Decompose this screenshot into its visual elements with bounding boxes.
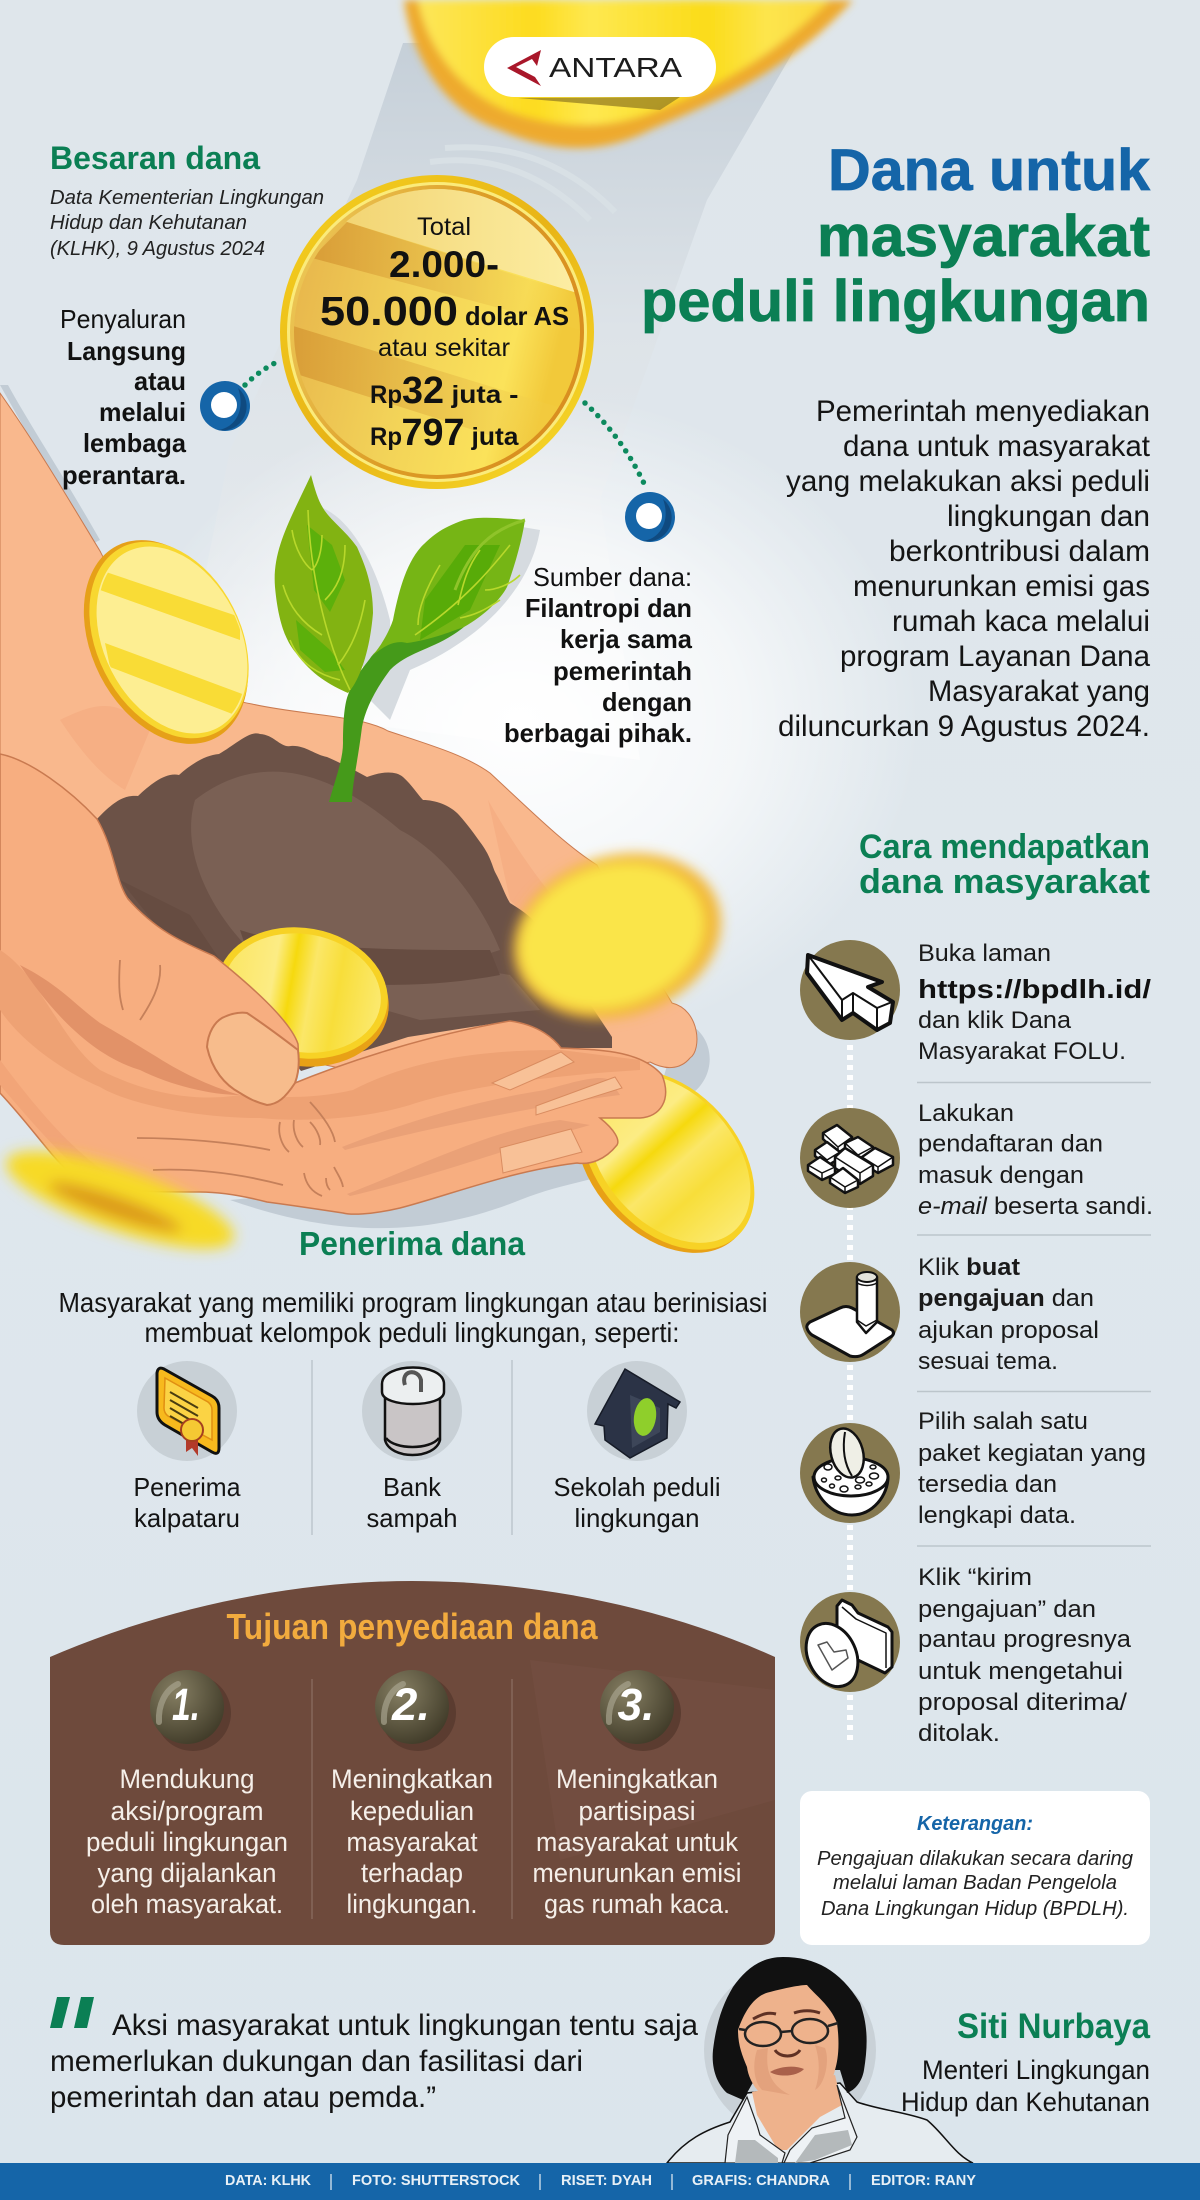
quote: memerlukan dukungan dan fasilitasi dari [50, 2045, 583, 2078]
recipients intro: Masyarakat yang memiliki program lingkungan atau berinisiasi [58, 1287, 768, 1318]
logo: ANTARA [484, 37, 716, 110]
coin text: 797 [402, 412, 464, 454]
goal 2: lingkungan. [346, 1889, 478, 1919]
step 4 text: tersedia dan [918, 1471, 1057, 1498]
speaker [901, 2007, 1150, 2117]
text: distribution: perantara. [62, 460, 186, 490]
heading: fund recipients: Penerima dana [299, 1225, 526, 1262]
step 1 text: https://bpdlh.id/ [918, 974, 1151, 1004]
intro text: dana untuk masyarakat [843, 430, 1151, 463]
text: distribution [60, 304, 187, 490]
note box: Pengajuan dilakukan secara daring [817, 1848, 1133, 1870]
coin text: 50.000 [320, 288, 458, 334]
stem [329, 627, 464, 802]
collar [725, 2085, 857, 2163]
recipient labels: kalpataru [134, 1503, 240, 1533]
source note: (KLHK), 9 Agustus 2024 [50, 238, 265, 260]
step 5 text: untuk mengetahui [918, 1658, 1123, 1685]
goal 1: aksi/program [110, 1796, 264, 1826]
glasses [739, 2019, 838, 2046]
heading: Besaran dana [50, 140, 324, 260]
logo: ANTARA: ANTARA [549, 52, 682, 83]
recipient labels: lingkungan [574, 1503, 700, 1533]
goal 3 [532, 1670, 742, 1919]
footer credits: RISET: DYAH [561, 2172, 652, 2189]
coin text [320, 213, 569, 454]
panel heading: Tujuan penyediaan dana [226, 1606, 598, 1647]
intro text: diluncurkan 9 Agustus 2024. [778, 710, 1150, 743]
goal 3: 3. [618, 1679, 654, 1730]
coin text: Rp [370, 381, 402, 409]
coin text: juta - [450, 381, 518, 409]
hand shadow [0, 385, 710, 1228]
text: fund source: Filantropi dan [525, 593, 692, 623]
shirt [667, 2083, 973, 2163]
text: fund source [504, 562, 693, 748]
step 5 text: ditolak. [918, 1720, 1000, 1747]
text: distribution: melalui [99, 397, 186, 427]
goal 3: masyarakat untuk [536, 1827, 738, 1857]
coin text: 2.000- [389, 244, 499, 285]
neck [752, 2075, 842, 2150]
step 2 text: masuk dengan [918, 1162, 1084, 1189]
step 2 text: e-mail beserta sandi. [918, 1193, 1153, 1220]
plant [275, 475, 540, 802]
step 3 text: ajukan proposal [918, 1317, 1099, 1344]
step 1 text [918, 940, 1151, 1065]
quote [50, 1997, 698, 2114]
goal 2: Meningkatkan [331, 1764, 493, 1794]
portrait: Siti Nurbaya [667, 1957, 973, 2163]
recipient labels: Bank [383, 1472, 442, 1502]
heading: how to get funding: Cara mendapatkan [859, 828, 1150, 866]
step 5 text: proposal diterima/ [918, 1689, 1127, 1716]
intro text: Pemerintah menyediakan [816, 395, 1150, 428]
recipients intro: membuat kelompok peduli lingkungan, seperti: [144, 1317, 680, 1348]
text: distribution: atau [134, 366, 186, 396]
heading: how to get funding [859, 828, 1150, 901]
recipient labels: sampah [366, 1503, 458, 1533]
panel: funding goals [50, 1581, 775, 1945]
coin text: Total [417, 213, 471, 241]
hand shading [0, 950, 640, 1120]
coin text: juta [470, 423, 520, 451]
goal 2: 2. [391, 1679, 430, 1730]
speaker: Hidup dan Kehutanan [901, 2087, 1150, 2117]
step 5 text [918, 1564, 1132, 1747]
illustration: hands, soil, plant, coins [0, 385, 789, 1287]
goal 2: kepedulian [350, 1796, 474, 1826]
back hand [0, 393, 697, 1100]
goal 1: yang dijalankan [98, 1858, 276, 1888]
quote: pemerintah dan atau pemda.” [50, 2081, 436, 2114]
step 4 icon [800, 1423, 900, 1523]
coin: blurred lower left [0, 1132, 244, 1268]
quote mark [50, 1997, 94, 2028]
speaker: Siti Nurbaya [957, 2007, 1150, 2046]
halo [704, 1964, 876, 2136]
goal 2 [331, 1670, 493, 1919]
step 3 text: Klik buat [918, 1254, 1020, 1281]
nose and brows [753, 2011, 820, 2056]
goal 1: Mendukung [120, 1764, 254, 1794]
coin: total fund [280, 170, 600, 489]
source note [50, 187, 324, 260]
step 1 text: dan klik Dana [918, 1007, 1072, 1034]
title: peduli lingkungan [641, 269, 1150, 334]
step 3 icon [800, 1262, 900, 1362]
heading: how to get funding: dana masyarakat [859, 863, 1150, 901]
footer credits: GRAFIS: CHANDRA [692, 2172, 830, 2189]
title: Dana untuk [828, 138, 1151, 203]
note box: melalui laman Badan Pengelola [833, 1872, 1117, 1894]
goal 3: partisipasi [578, 1796, 696, 1826]
step 1 text: Masyarakat FOLU. [918, 1038, 1126, 1065]
coin text: 32 [402, 370, 444, 412]
text: distribution: Penyaluran [60, 304, 186, 334]
recipient labels: Sekolah peduli [554, 1472, 720, 1502]
soil [97, 733, 612, 1071]
source note: Data Kementerian Lingkungan [50, 187, 324, 209]
recipients intro [58, 1287, 768, 1348]
recipient labels: Penerima [134, 1472, 241, 1502]
step 3 text: pengajuan dan [918, 1285, 1094, 1312]
step 4 text: paket kegiatan yang [918, 1440, 1146, 1467]
coin: blurred right [491, 827, 743, 1045]
footer credits: FOTO: SHUTTERSTOCK [352, 2172, 520, 2189]
goal 1: oleh masyarakat. [91, 1889, 283, 1919]
text: fund source: kerja sama [560, 624, 693, 654]
finger nails [492, 1052, 622, 1173]
hair [713, 1957, 867, 2100]
intro text: menurunkan emisi gas [853, 570, 1150, 603]
connector: distribution [200, 361, 279, 431]
footer credits: DATA: KLHK [225, 2172, 311, 2189]
goal 3: menurunkan emisi [532, 1858, 742, 1888]
source note: Hidup dan Kehutanan [50, 212, 247, 234]
text: fund source: Sumber dana: [533, 562, 692, 592]
title [641, 138, 1151, 334]
step 2 text: pendaftaran dan [918, 1130, 1103, 1158]
step 5 text: pengajuan” dan [918, 1596, 1096, 1623]
intro text: Masyarakat yang [928, 675, 1150, 708]
goal 2: masyarakat [346, 1827, 478, 1857]
face [738, 1985, 838, 2103]
step 3 text: sesuai tema. [918, 1348, 1058, 1375]
connector: source [585, 403, 675, 542]
quote: Aksi masyarakat untuk lingkungan tentu saja [112, 2009, 698, 2042]
goal 3: gas rumah kaca. [544, 1889, 730, 1919]
recipients row [134, 1360, 720, 1535]
goal 3: Meningkatkan [556, 1764, 718, 1794]
coin text: dolar AS [465, 301, 569, 331]
goal 1 [86, 1670, 288, 1919]
logo arrow [507, 50, 541, 86]
goal 2: terhadap [361, 1858, 463, 1888]
coin text: Rp [370, 423, 402, 451]
step 1 text: Buka laman [918, 940, 1051, 967]
goal 1: 1. [172, 1679, 200, 1730]
intro text: rumah kaca melalui [892, 605, 1150, 638]
top coin [404, 0, 853, 148]
icon: certificate [137, 1361, 237, 1461]
step 2 text [918, 1100, 1153, 1220]
icon: bird house school [587, 1361, 687, 1461]
leaf shadows [323, 508, 540, 720]
mouth [770, 2067, 804, 2076]
title: masyarakat [817, 204, 1150, 269]
text: fund source: berbagai pihak. [504, 718, 692, 748]
coin: left [84, 540, 249, 744]
text: distribution: Langsung [67, 336, 186, 366]
step 2 text: Lakukan [918, 1100, 1014, 1127]
intro text: program Layanan Dana [840, 640, 1150, 673]
step 3 text [918, 1254, 1099, 1375]
step 2 icon [800, 1108, 900, 1208]
left leaf [275, 475, 373, 693]
heading: Besaran dana: Besaran dana [50, 140, 260, 176]
intro text [778, 395, 1151, 743]
step 4 text [918, 1408, 1146, 1529]
footer credits: EDITOR: RANY [871, 2172, 976, 2189]
text: distribution: lembaga [83, 428, 187, 458]
right leaf [371, 518, 525, 657]
goal 1: peduli lingkungan [86, 1827, 288, 1857]
step 1 icon [800, 940, 900, 1040]
note box: Keterangan: [917, 1813, 1033, 1835]
step 5 text: pantau progresnya [918, 1626, 1132, 1653]
intro text: yang melakukan aksi peduli [786, 465, 1150, 498]
note box: Dana Lingkungan Hidup (BPDLH). [821, 1898, 1129, 1920]
text: fund source: pemerintah [553, 656, 692, 686]
step 4 text: Pilih salah satu [918, 1408, 1088, 1435]
thumb nail [207, 1013, 299, 1105]
intro text: berkontribusi dalam [889, 535, 1150, 568]
step 5 text: Klik “kirim [918, 1564, 1032, 1591]
note box [800, 1791, 1150, 1945]
front hand [0, 754, 666, 1214]
steps timeline [796, 940, 1153, 1747]
text: fund source: dengan [602, 687, 692, 717]
coin: middle [203, 914, 400, 1080]
step 4 text: lengkapi data. [918, 1502, 1076, 1529]
footer credits [0, 2163, 1200, 2200]
coin: lower right [540, 1034, 789, 1287]
intro text: lingkungan dan [947, 500, 1150, 533]
step 5 icon [796, 1592, 900, 1695]
recipient labels [134, 1472, 720, 1533]
icon: bin [362, 1361, 462, 1461]
speaker: Menteri Lingkungan [922, 2055, 1150, 2085]
coin text: atau sekitar [378, 334, 510, 362]
